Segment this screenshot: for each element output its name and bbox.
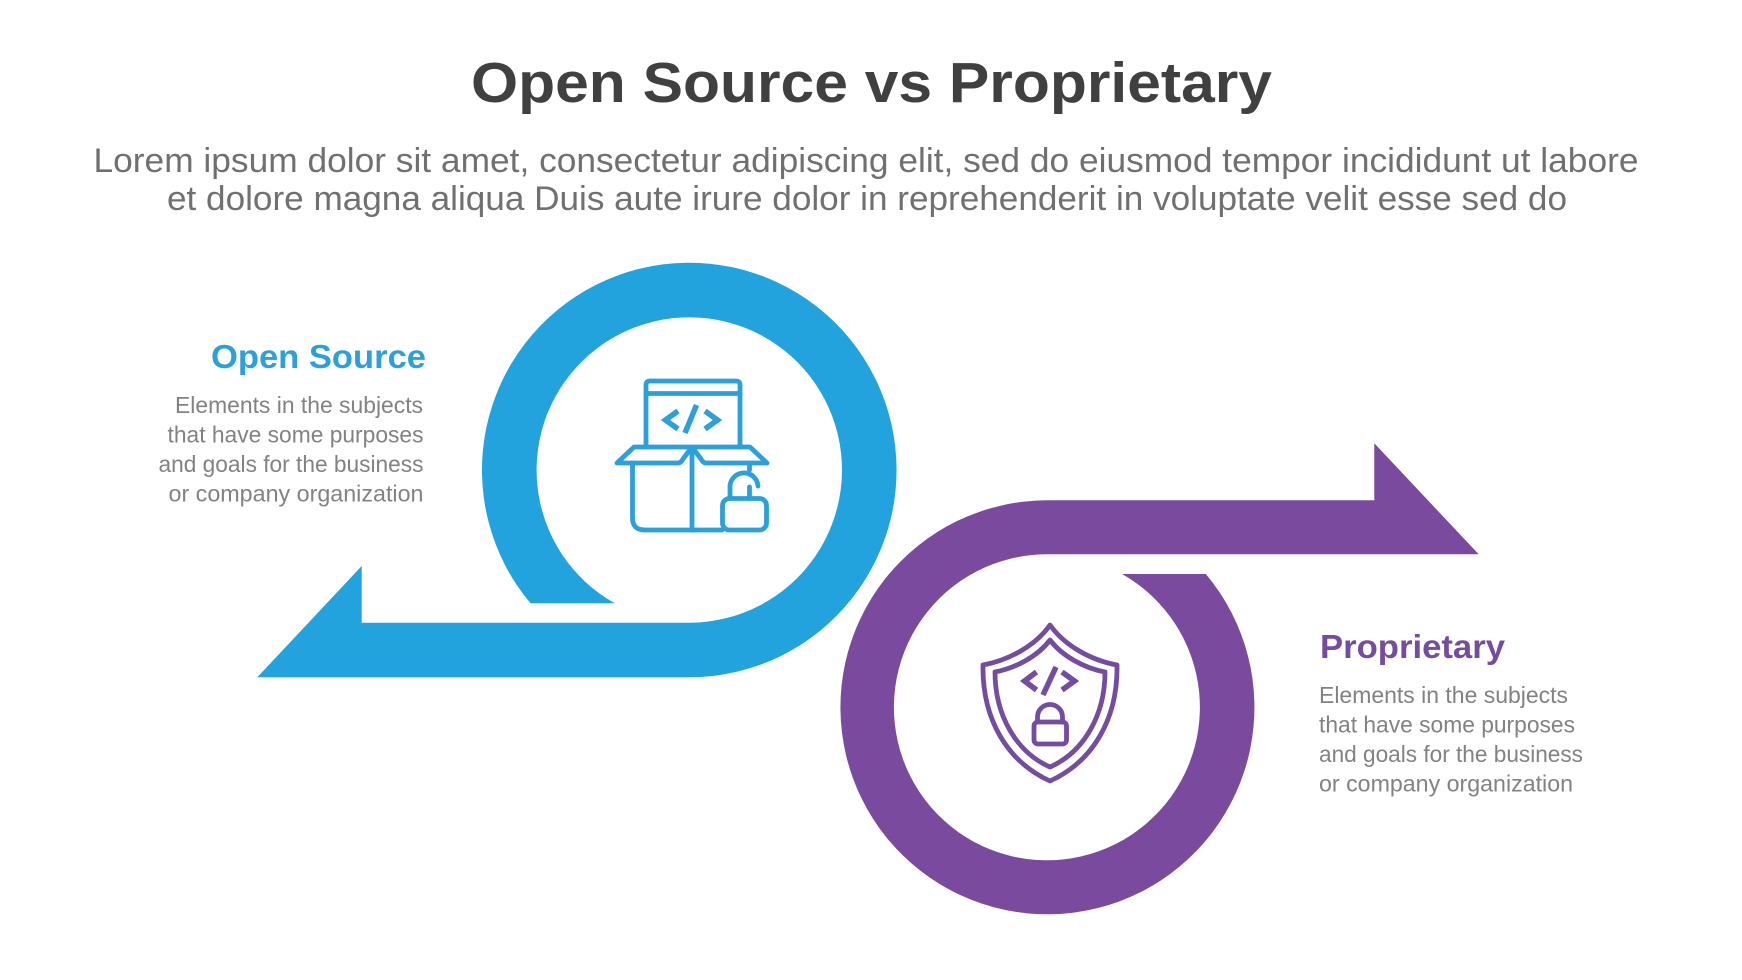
subtitle text block — [94, 142, 1638, 218]
description: open source: and goals for the business — [158, 451, 424, 477]
blue looping arrow pointing left — [257, 263, 897, 677]
description: open source: that have some purposes — [168, 422, 424, 448]
heading: open source: Open Source — [211, 338, 426, 375]
description: open source: or company organization — [168, 480, 424, 506]
panel: open source — [158, 263, 897, 677]
description: proprietary: that have some purposes — [1319, 712, 1575, 738]
title: Open Source vs Proprietary — [471, 51, 1272, 115]
panel: proprietary — [840, 443, 1583, 914]
description: proprietary: and goals for the business — [1319, 741, 1583, 767]
description: proprietary: Elements in the subjects — [1319, 682, 1568, 708]
description: open source: Elements in the subjects — [175, 392, 423, 418]
description: proprietary: or company organization — [1319, 770, 1573, 796]
subtitle text block: Lorem ipsum dolor sit amet, consectetur adipiscing elit, sed do eiusmod tempor incididunt ut labore — [94, 142, 1638, 180]
subtitle text block: et dolore magna aliqua Duis aute irure dolor in reprehenderit in voluptate velit esse sed do — [167, 180, 1567, 218]
icon: shield with code and padlock — [983, 625, 1117, 781]
description: open source — [158, 392, 424, 506]
heading: proprietary: Proprietary — [1320, 628, 1506, 665]
purple looping arrow pointing right — [840, 443, 1479, 914]
description: proprietary — [1319, 682, 1583, 796]
icon: code window in open box with unlocked padlock — [617, 381, 767, 530]
